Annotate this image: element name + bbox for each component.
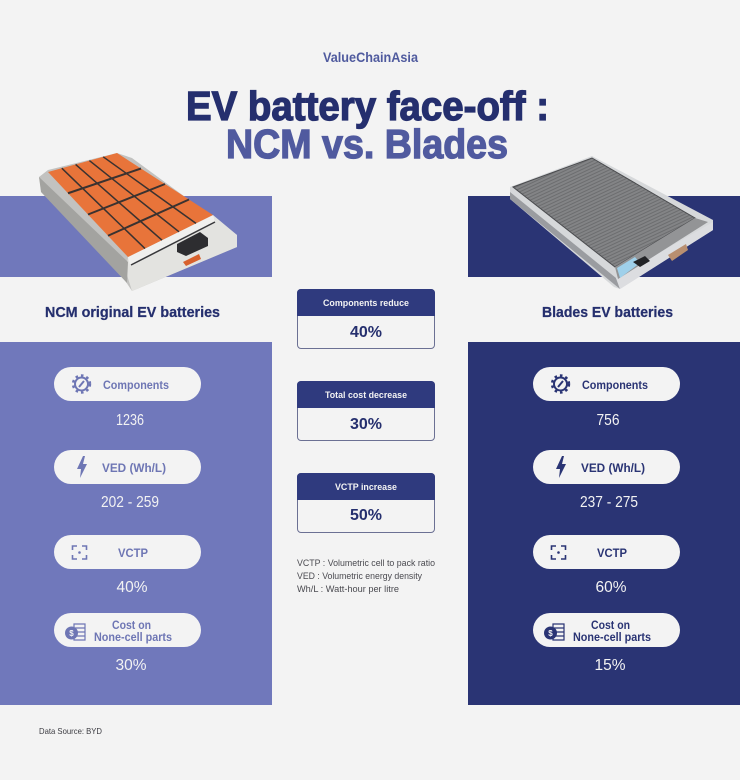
pill: cost on none-cell parts: $ (548, 629, 553, 638)
data source: Data Source: BYD (39, 726, 102, 736)
legend: abbreviations (297, 558, 435, 594)
value: VCTP: 40% (116, 579, 148, 596)
heading: NCM: NCM original EV batteries (45, 304, 220, 321)
legend: abbreviations: Wh/L : Watt-hour per litre (297, 584, 399, 594)
pill: cost on none-cell parts (54, 613, 201, 647)
pill: VCTP (533, 535, 680, 569)
legend: abbreviations: VCTP : Volumetric cell to pack ratio (297, 558, 435, 568)
panel: Blades stats (468, 342, 740, 705)
value: cost: 15% (594, 657, 626, 674)
callout: components reduce (297, 289, 435, 348)
callout: components reduce: Components reduce (323, 298, 409, 309)
value: components: 756 (596, 412, 620, 429)
callout: VCTP increase: 50% (350, 507, 382, 524)
pill: components (533, 367, 680, 401)
callout: total cost decrease: 30% (350, 416, 382, 433)
value: VED: 202 - 259 (101, 494, 159, 511)
panel: NCM image band (0, 196, 272, 277)
title: EV battery face-off : (186, 83, 549, 129)
brand name: ValueChainAsia (323, 50, 418, 65)
callout: VCTP increase: VCTP increase (335, 482, 397, 493)
pill: VCTP (54, 535, 201, 569)
pill: VCTP: VCTP (597, 546, 627, 560)
image: NCM battery pack (39, 153, 237, 291)
pill: cost on none-cell parts: Cost on (591, 620, 630, 632)
pill: cost on none-cell parts (533, 613, 680, 647)
pill: components (54, 367, 201, 401)
value: VCTP: 60% (596, 579, 626, 596)
callout: total cost decrease: Total cost decrease (325, 390, 407, 401)
pill: cost on none-cell parts: $ (69, 629, 74, 638)
pill: VED (54, 450, 201, 484)
panel: NCM stats (0, 342, 272, 705)
pill: cost on none-cell parts: None-cell parts (573, 632, 651, 644)
title: NCM vs. Blades (226, 121, 508, 167)
pill: VED: VED (Wh/L) (102, 461, 166, 475)
legend: abbreviations: VED : Volumetric energy density (297, 571, 422, 581)
panel: Blades image band (468, 196, 740, 277)
pill: VCTP: VCTP (118, 546, 148, 560)
callout: components reduce: 40% (350, 324, 382, 341)
title (186, 83, 549, 167)
image: Blades battery pack (510, 156, 713, 289)
pill: components: Components (582, 378, 648, 392)
callout: total cost decrease (297, 381, 435, 440)
heading: Blades: Blades EV batteries (542, 304, 673, 321)
pill: cost on none-cell parts: Cost on (112, 620, 151, 632)
pill: components: Components (103, 378, 169, 392)
value: cost: 30% (116, 657, 146, 674)
pill: VED (533, 450, 680, 484)
pill: VED: VED (Wh/L) (581, 461, 645, 475)
value: VED: 237 - 275 (580, 494, 638, 511)
callout: VCTP increase (297, 473, 435, 532)
value: components: 1236 (116, 412, 144, 429)
pill: cost on none-cell parts: None-cell parts (94, 632, 172, 644)
